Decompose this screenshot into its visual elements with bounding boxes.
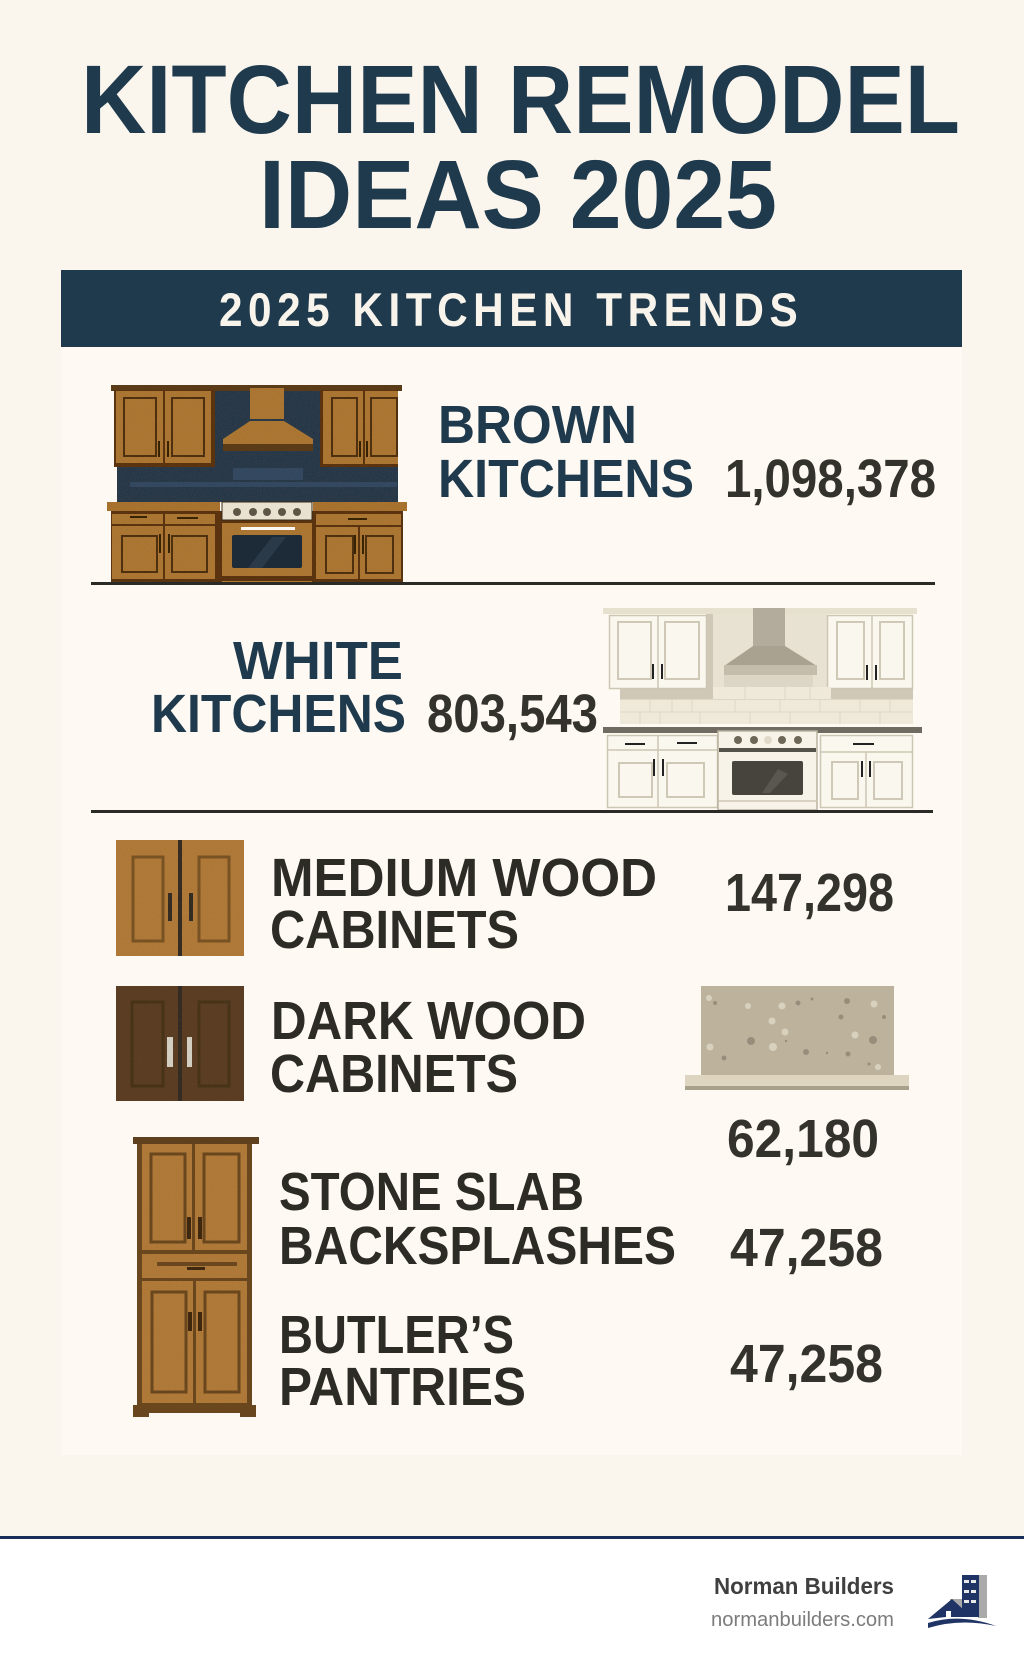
divider line [91, 582, 935, 585]
footer company name: Norman Builders [714, 1573, 894, 1599]
icon: brown kitchen [107, 385, 407, 585]
title: KITCHEN REMODEL [81, 45, 960, 154]
label: white kitchens [151, 631, 406, 744]
stat: brown kitchens: 1,098,378 [725, 449, 936, 509]
label: stone slab backsplashes: STONE SLAB [279, 1162, 584, 1222]
label: butler's pantries: PANTRIES [279, 1357, 526, 1417]
section banner [61, 270, 962, 347]
icon: butler's pantry cabinet [133, 1137, 259, 1417]
label: dark wood cabinets: DARK WOOD [271, 991, 586, 1051]
label: medium wood cabinets: CABINETS [270, 900, 519, 960]
footer website: normanbuilders.com [711, 1609, 894, 1631]
label: medium wood cabinets [270, 848, 657, 960]
label: stone slab backsplashes [279, 1162, 676, 1276]
label: medium wood cabinets: MEDIUM WOOD [271, 848, 657, 908]
label: brown kitchens: BROWN [438, 395, 637, 455]
label: stone slab backsplashes: BACKSPLASHES [279, 1216, 676, 1276]
title [81, 45, 960, 249]
label: white kitchens: KITCHENS [151, 684, 406, 744]
icon: dark wood cabinet [116, 986, 244, 1101]
label: dark wood cabinets [270, 991, 586, 1104]
icon: white kitchen [603, 608, 922, 810]
icon: medium wood cabinet [116, 840, 244, 956]
label: butler's pantries: BUTLER’S [279, 1305, 514, 1365]
icon: company logo [928, 1575, 996, 1628]
label: butler's pantries [279, 1305, 526, 1417]
stat: medium wood cabinets: 147,298 [725, 863, 894, 923]
icon: stone slab backsplash [685, 986, 909, 1090]
label: white kitchens: WHITE [233, 631, 403, 691]
content panel [61, 347, 962, 1455]
section banner: 2025 KITCHEN TRENDS [219, 285, 798, 337]
footer [0, 1536, 1024, 1666]
label: brown kitchens [438, 395, 694, 509]
icon: brown kitchen oven details [222, 502, 312, 568]
label: brown kitchens: KITCHENS [438, 449, 694, 509]
title: IDEAS 2025 [259, 140, 777, 249]
label: dark wood cabinets: CABINETS [270, 1044, 518, 1104]
stat: stone slab backsplashes: 47,258 [730, 1218, 883, 1278]
stat: butler's pantries: 47,258 [730, 1334, 883, 1394]
stat: dark wood cabinets: 62,180 [727, 1109, 879, 1169]
divider line [91, 810, 933, 813]
stat: white kitchens: 803,543 [427, 684, 598, 744]
